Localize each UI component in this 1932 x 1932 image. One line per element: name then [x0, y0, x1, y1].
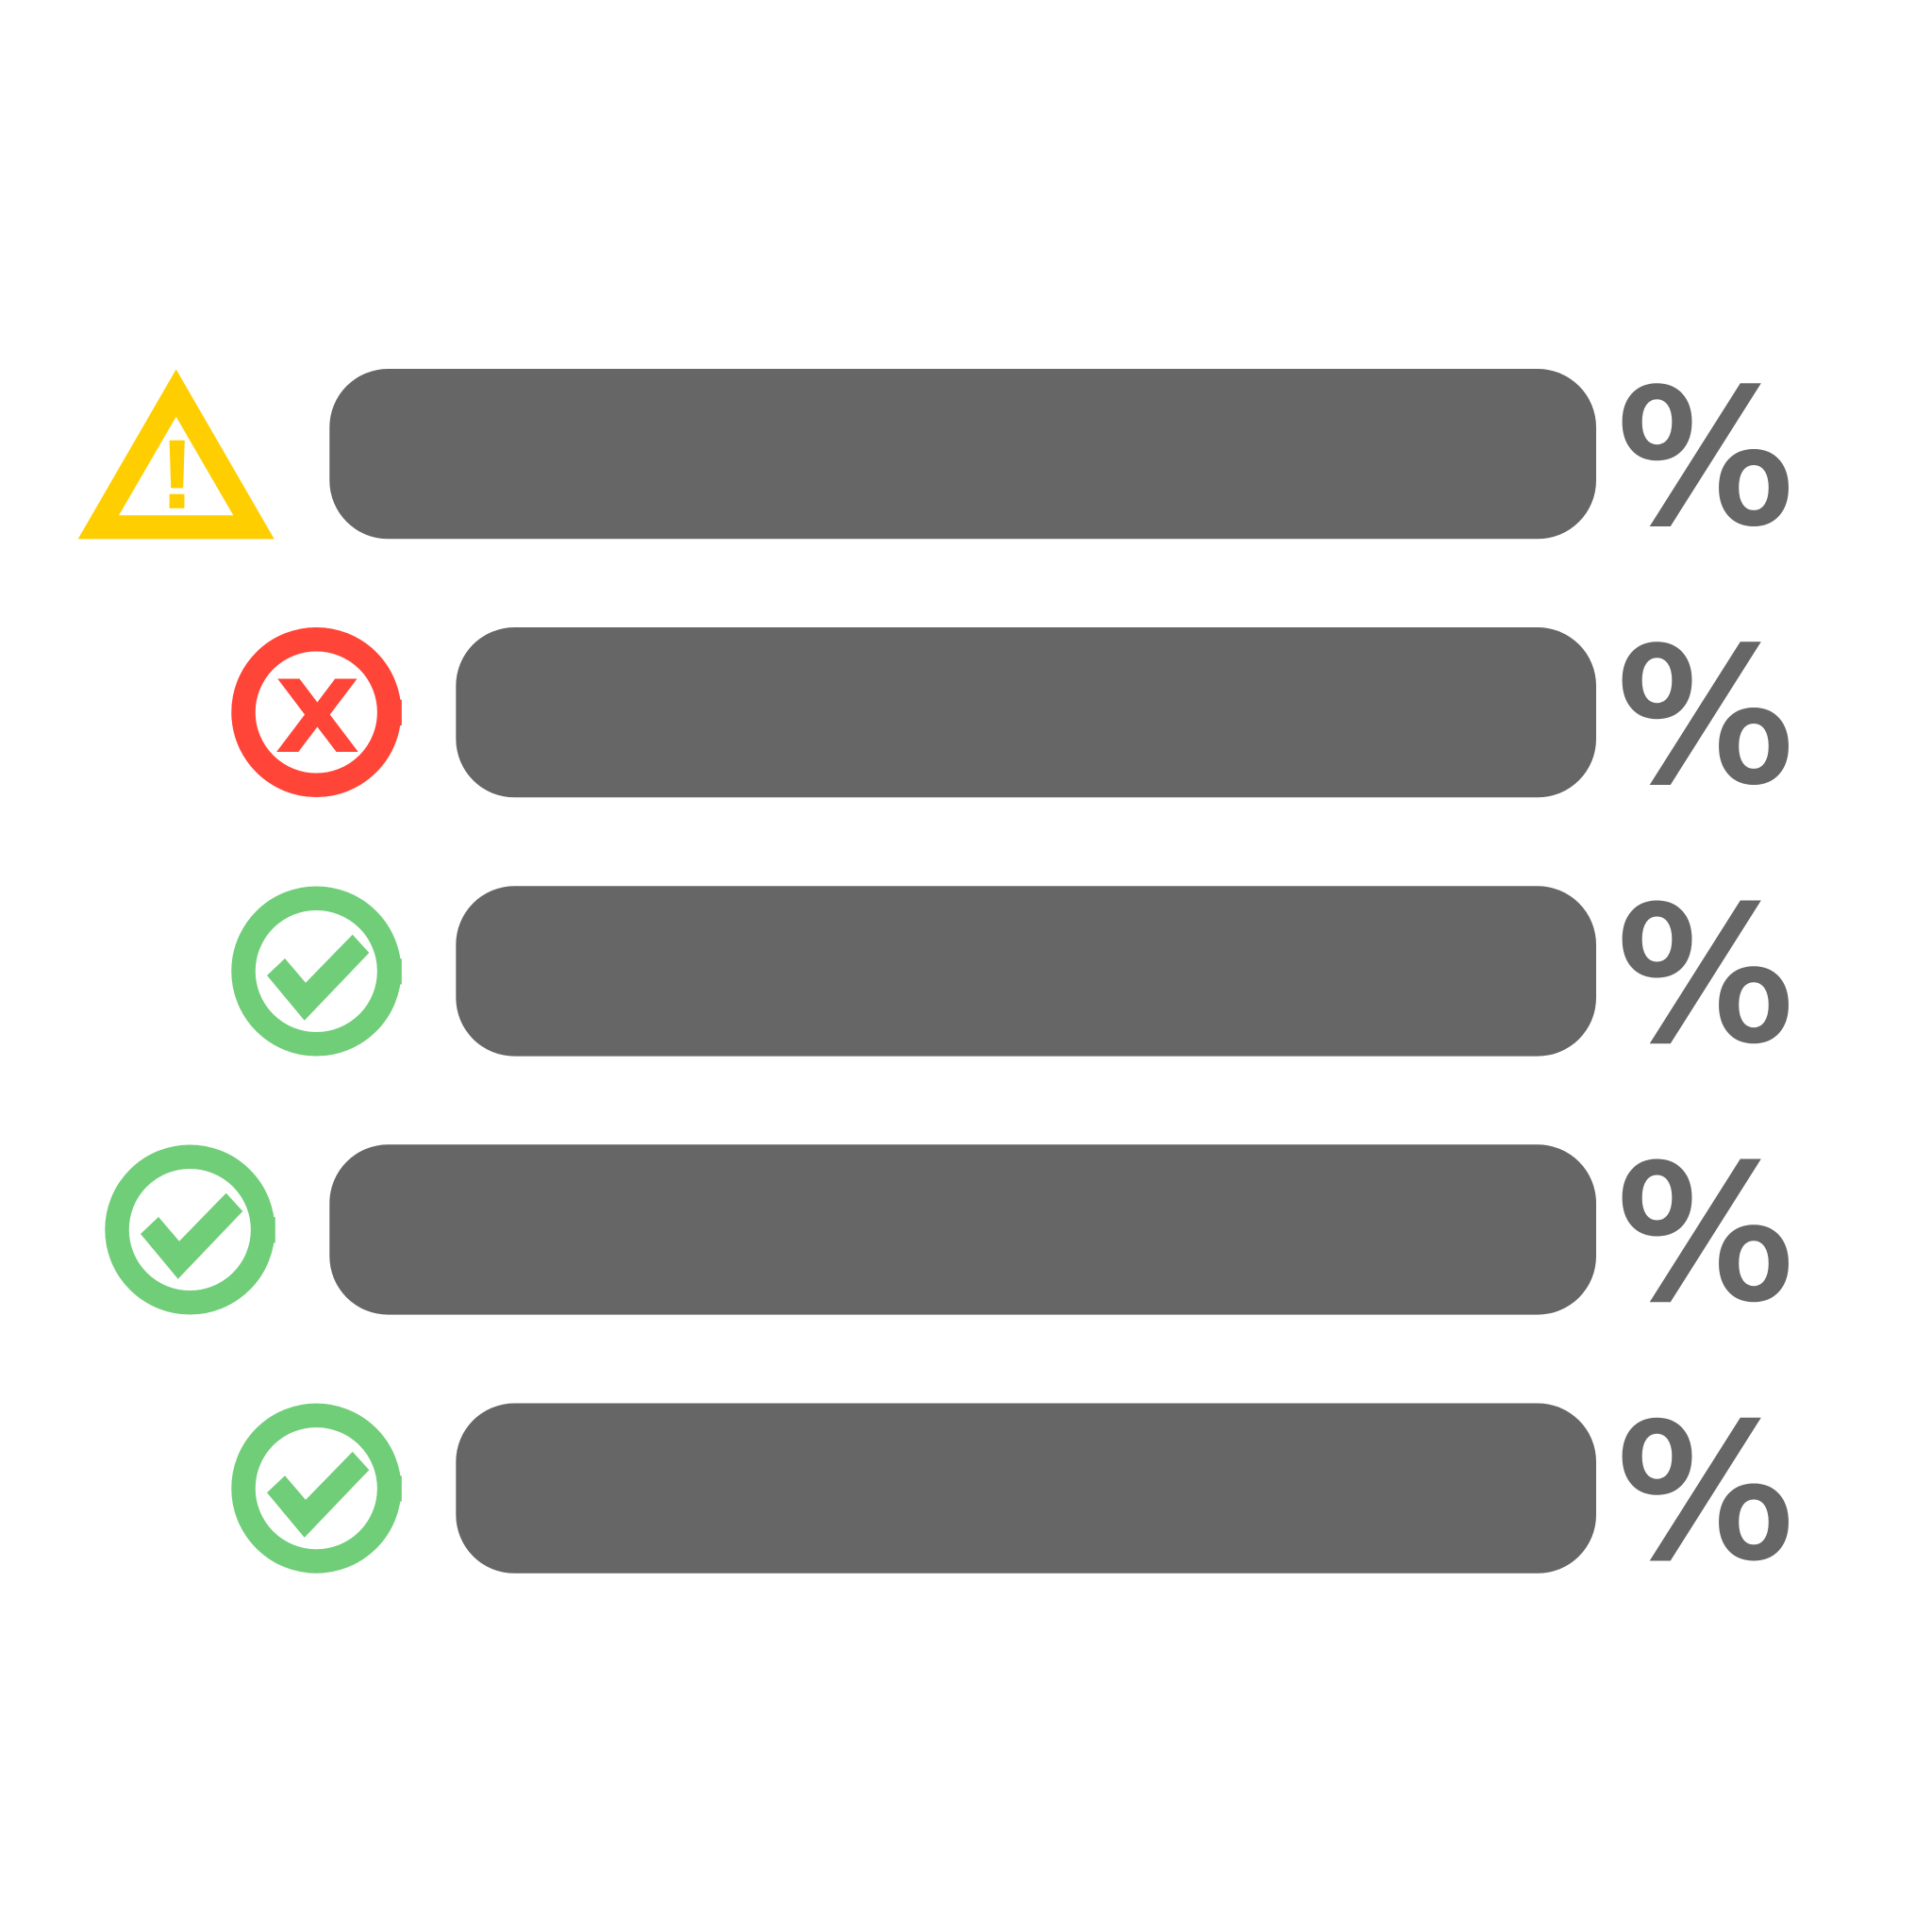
- icon: green check in circle: [243, 1415, 402, 1561]
- percent sign 3: %: [1614, 869, 1797, 1082]
- row 1: warning: [78, 351, 1797, 565]
- bar 2: [456, 627, 1596, 797]
- bar 4: [329, 1144, 1596, 1315]
- row 2: failure: [243, 609, 1797, 824]
- icon: green check in circle: [117, 1157, 275, 1303]
- icon: warning triangle: [78, 370, 275, 539]
- percent sign 1: %: [1614, 351, 1797, 565]
- bar 1: [329, 369, 1596, 539]
- bar 5: [456, 1404, 1596, 1574]
- row 5: success: [243, 1386, 1797, 1599]
- icon: red cross in circle: X: [275, 659, 360, 776]
- icon: red cross in circle: [243, 640, 402, 785]
- icon: warning triangle: !: [161, 421, 193, 528]
- percent sign 5: %: [1614, 1386, 1797, 1599]
- row 3: success: [243, 869, 1797, 1082]
- percent sign 2: %: [1614, 609, 1797, 824]
- row 4: success: [117, 1127, 1797, 1341]
- icon: green check in circle: [243, 898, 402, 1044]
- percent sign 4: %: [1614, 1127, 1797, 1341]
- bar 3: [456, 886, 1596, 1057]
